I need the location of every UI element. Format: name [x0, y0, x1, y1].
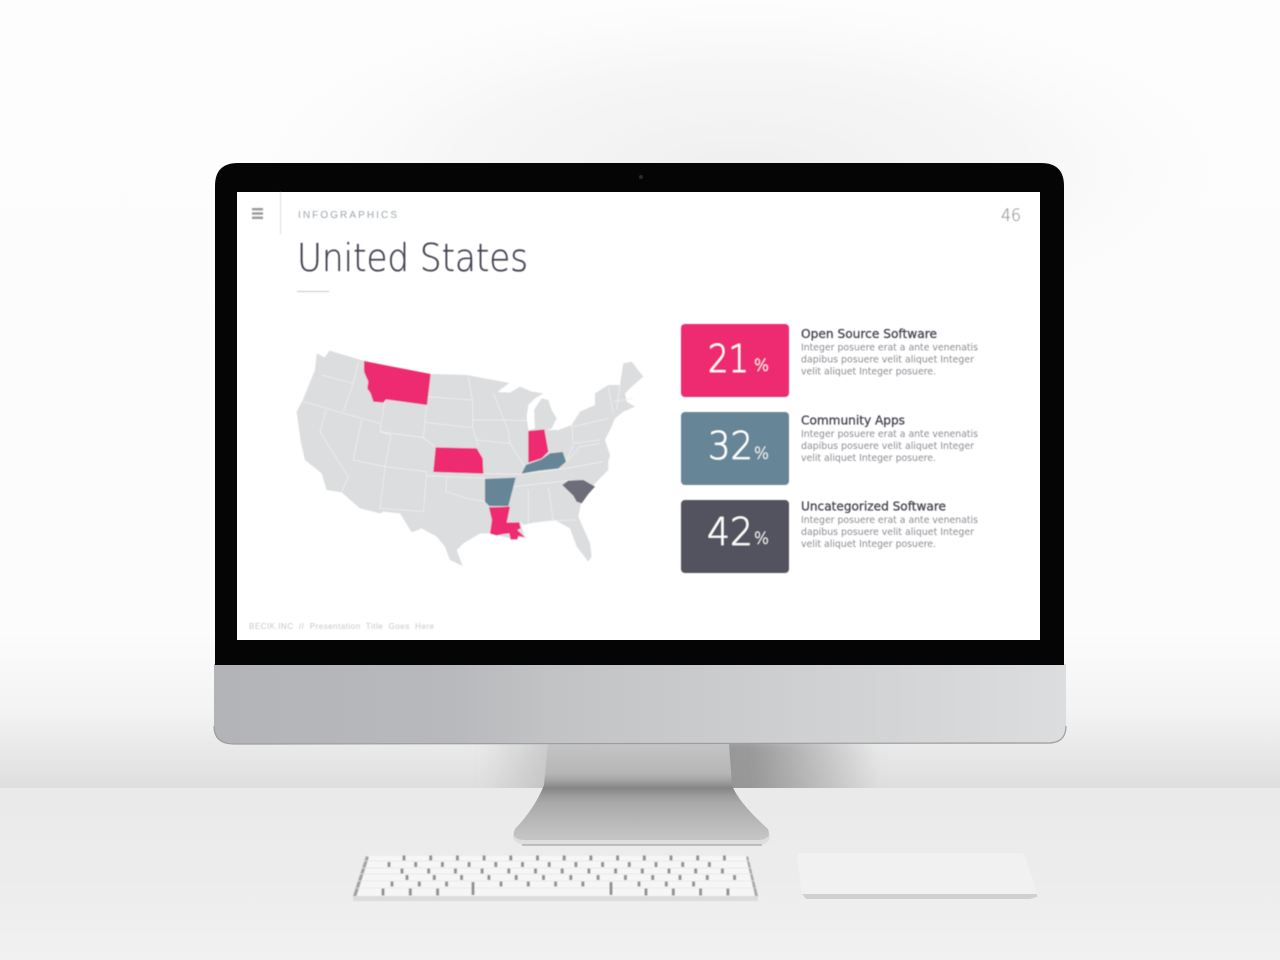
stat card: Uncategorized Software: velit aliquet Integer posuere.: [801, 539, 936, 550]
stat card: Community Apps: dapibus posuere velit aliquet Integer: [801, 441, 975, 452]
state: Kentucky: [522, 452, 566, 474]
map of the United States: [297, 351, 643, 566]
stat card: Community Apps: 32: [708, 424, 753, 468]
state: Arkansas: [485, 478, 516, 506]
trackpad: [797, 853, 1037, 899]
stat card: Open Source Software: Open Source Software: [801, 327, 937, 341]
stat card: Uncategorized Software: 42: [707, 510, 753, 554]
stat card: Uncategorized Software: [681, 500, 978, 573]
monitor body: [214, 163, 1066, 744]
footer text: BECIK.INC // Presentation Title Goes Here: [249, 622, 435, 631]
soft glow above monitor: [270, 0, 1210, 340]
stat card: Community Apps: Community Apps: [801, 414, 905, 428]
stand shadow on wall: [500, 744, 866, 788]
stat card: Open Source Software: [681, 324, 978, 397]
state: Montana: [364, 361, 431, 405]
stat card: Community Apps: Integer posuere erat a ante venenatis: [801, 429, 978, 440]
monitor chin: [214, 664, 1066, 744]
section label: INFOGRAPHICS: [298, 210, 397, 221]
stat card: Uncategorized Software: dapibus posuere velit aliquet Integer: [801, 527, 975, 538]
stat card: Open Source Software: Integer posuere erat a ante venenatis: [801, 342, 978, 354]
slide content: [249, 192, 1021, 631]
page number: 46: [1001, 206, 1021, 226]
keyboard: [353, 856, 758, 901]
stat card: Community Apps: %: [754, 444, 769, 464]
monitor stand: [513, 744, 770, 845]
stat card: Community Apps: velit aliquet Integer posuere.: [801, 453, 936, 464]
stat card: Community Apps: [681, 412, 978, 485]
stat card: Uncategorized Software: Uncategorized Software: [801, 500, 946, 514]
base map: [297, 351, 643, 566]
icon: hamburger menu: [252, 208, 263, 219]
state borders: [302, 362, 633, 523]
title: United States: [297, 236, 528, 280]
state: Louisiana: [489, 507, 525, 539]
stat card: Open Source Software: %: [754, 356, 769, 376]
desk surface: [0, 788, 1280, 960]
stat card: Uncategorized Software: Integer posuere erat a ante venenatis: [801, 515, 978, 526]
title underline: [297, 291, 329, 292]
stat card: Uncategorized Software: %: [754, 529, 769, 549]
webcam: [639, 175, 643, 179]
stat card: Open Source Software: dapibus posuere velit aliquet Integer: [801, 354, 975, 366]
screen: [237, 192, 1040, 640]
state: South Carolina: [562, 480, 595, 503]
stat card: Open Source Software: velit aliquet Integer posuere.: [801, 366, 936, 378]
stat card: Open Source Software: 21: [708, 337, 749, 381]
state: Kansas: [433, 447, 483, 474]
state: Indiana: [528, 429, 548, 463]
header divider: [280, 192, 281, 234]
monitor bezel: [215, 163, 1064, 665]
